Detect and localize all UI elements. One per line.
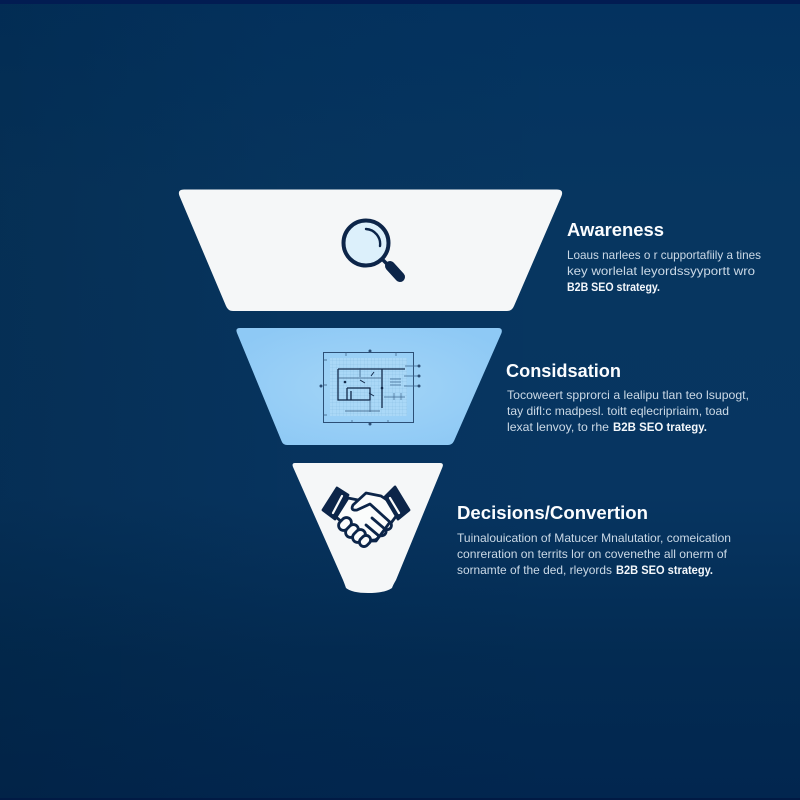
funnel shape: consideration bbox=[236, 328, 502, 445]
decision description: B2B SEO strategy. bbox=[616, 563, 713, 577]
decision description: sornamte of the ded, rleyords bbox=[457, 563, 612, 577]
consideration description: tay difl:c madpesl. toitt eqlecripriaim, toad bbox=[507, 404, 729, 418]
text block: awareness bbox=[567, 220, 761, 294]
heading: consideration: Considsation bbox=[506, 361, 621, 381]
consideration description: Tocoweert spprorci a lealipu tlan teo lsupogt, bbox=[507, 388, 749, 402]
panel: decision funnel tier bbox=[293, 463, 443, 593]
panel: awareness funnel tier bbox=[179, 190, 562, 311]
consideration description: lexat lenvoy, to rhe bbox=[507, 420, 609, 434]
awareness description: B2B SEO strategy. bbox=[567, 280, 660, 294]
icon: magnifying glass bbox=[344, 220, 400, 277]
text block: consideration bbox=[506, 361, 749, 434]
decision description: Tuinalouication of Matucer Mnalutatior, comeication bbox=[457, 531, 731, 545]
heading: awareness: Awareness bbox=[567, 220, 664, 240]
icon: blueprint floor plan bbox=[320, 350, 420, 426]
decision description bbox=[457, 531, 731, 577]
panel: consideration funnel tier bbox=[236, 328, 502, 445]
awareness description: key worlelat leyordssyyportt wro bbox=[567, 264, 755, 278]
awareness description bbox=[567, 248, 761, 294]
text block: decision bbox=[457, 503, 731, 577]
funnel shape: awareness bbox=[179, 190, 562, 311]
funnel shape: decision bbox=[293, 463, 443, 593]
awareness description: Loaus narlees o r cupportafiily a tines bbox=[567, 248, 761, 262]
heading: decision: Decisions/Convertion bbox=[457, 503, 648, 523]
icon: handshake bbox=[323, 487, 409, 548]
consideration description bbox=[507, 388, 749, 434]
decision description: conreration on territs lor on covenethe all onerm of bbox=[457, 547, 728, 561]
consideration description: B2B SEO trategy. bbox=[613, 420, 707, 434]
